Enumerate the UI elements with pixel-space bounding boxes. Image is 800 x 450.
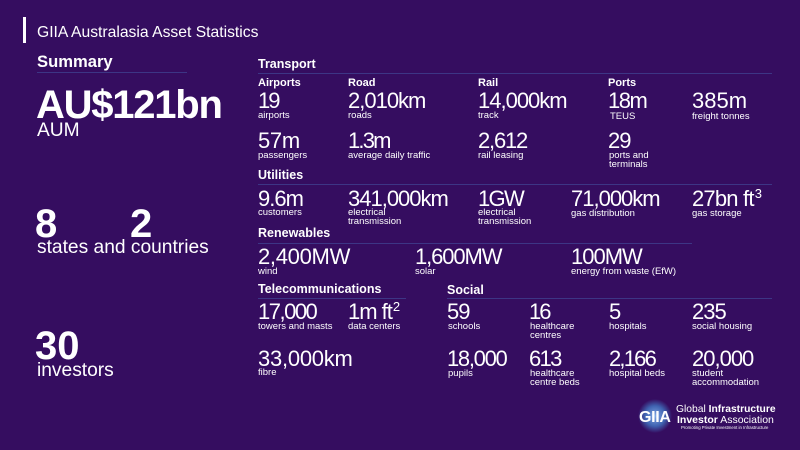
column: road: average daily traffic xyxy=(348,150,430,161)
panel: social: Social xyxy=(447,283,484,297)
panel: utilities: customers xyxy=(258,207,302,218)
column: road xyxy=(348,77,430,161)
column: rail: track xyxy=(478,110,499,121)
panel: utilities: 341,000km xyxy=(348,186,448,211)
title: GIIA Australasia Asset Statistics xyxy=(37,24,259,41)
column: ports xyxy=(608,77,750,170)
stat: investors: investors xyxy=(37,360,114,381)
panel: renewables: 1,600MW xyxy=(415,244,503,269)
panel: social: 5 xyxy=(609,299,621,324)
panel: social: 2,166 xyxy=(609,346,657,371)
panel: telecommunications: 33,000km xyxy=(258,346,353,371)
stat: assets under management: AU$121bn xyxy=(36,83,222,127)
column: rail: 2,612 xyxy=(478,128,528,153)
panel: telecommunications: fibre xyxy=(258,367,276,378)
panel: social: schools xyxy=(448,321,480,332)
panel: utilities xyxy=(258,168,772,227)
panel: social: pupils xyxy=(448,368,473,379)
panel: social: healthcare xyxy=(530,368,574,379)
column: airports: 19 xyxy=(258,88,280,113)
logo: GIIA: Promoting Private Investment in Infrastructure xyxy=(681,425,769,430)
panel: utilities: 71,000km xyxy=(571,186,660,211)
column: ports: terminals xyxy=(609,159,648,170)
column: airports: 57m xyxy=(258,128,300,153)
panel: social: 16 xyxy=(529,299,551,324)
column: rail: rail leasing xyxy=(478,150,523,161)
panel: social: centres xyxy=(530,330,561,341)
panel: utilities: gas storage xyxy=(692,208,742,219)
panel: utilities: electrical xyxy=(348,207,386,218)
stat: investors xyxy=(35,324,114,381)
panel: telecommunications: 17,000 xyxy=(258,299,318,324)
panel: transport xyxy=(258,57,772,170)
column: ports: TEUS xyxy=(610,111,635,122)
column: ports: 385m xyxy=(692,88,747,113)
panel: social: hospital beds xyxy=(609,368,665,379)
panel: renewables xyxy=(257,226,692,277)
logo: GIIA: Investor Association xyxy=(677,414,774,426)
column: airports: airports xyxy=(258,110,290,121)
panel: utilities: transmission xyxy=(348,216,401,227)
column: rail: Rail xyxy=(478,77,498,89)
panel: social: centre beds xyxy=(530,377,580,388)
heading: summary: Summary xyxy=(37,52,113,71)
panel: utilities: 1GW xyxy=(478,186,525,211)
panel: utilities: gas distribution xyxy=(571,208,635,219)
panel: social xyxy=(447,283,772,388)
column: ports: 18m xyxy=(608,88,646,113)
column: ports: freight tonnes xyxy=(692,111,750,122)
stat: states and countries: 8 xyxy=(35,202,57,246)
panel: renewables: energy from waste (EfW) xyxy=(571,266,676,277)
column: road: 1.3m xyxy=(348,128,390,153)
panel: renewables: solar xyxy=(415,266,436,277)
column: rail: 14,000km xyxy=(478,88,567,113)
column: road: roads xyxy=(348,110,372,121)
panel: telecommunications: data centers xyxy=(348,321,401,332)
column: airports: passengers xyxy=(258,150,307,161)
panel: renewables: wind xyxy=(257,266,278,277)
panel: social: 59 xyxy=(447,299,470,324)
title xyxy=(23,17,259,43)
panel: utilities: 3 xyxy=(755,186,762,201)
column: ports: Ports xyxy=(608,77,636,89)
panel: renewables: 100MW xyxy=(571,244,643,269)
panel: telecommunications: towers and masts xyxy=(258,321,333,332)
column: road: Road xyxy=(348,77,376,89)
panel: social: social housing xyxy=(692,321,752,332)
panel: social: accommodation xyxy=(692,377,759,388)
panel: utilities: 9.6m xyxy=(258,186,303,211)
column: road: 2,010km xyxy=(348,88,425,113)
column: rail xyxy=(478,77,567,161)
stat: states and countries xyxy=(35,202,209,258)
column: airports: Airports xyxy=(258,77,301,89)
panel: utilities: electrical xyxy=(478,207,516,218)
stat: states and countries: states and countries xyxy=(37,237,209,258)
panel: renewables: Renewables xyxy=(258,226,330,240)
panel: social: 613 xyxy=(529,346,562,371)
column: ports: ports and xyxy=(609,150,649,161)
panel: telecommunications xyxy=(258,282,406,378)
panel: utilities: 27bn ft xyxy=(692,186,754,211)
panel: telecommunications: 1m ft xyxy=(348,299,392,324)
stat: investors: 30 xyxy=(35,324,80,368)
panel: social: student xyxy=(692,368,724,379)
panel: social: 20,000 xyxy=(692,346,754,371)
panel: social: 18,000 xyxy=(447,346,508,371)
panel: social: healthcare xyxy=(530,321,574,332)
stat: assets under management: AUM xyxy=(37,120,80,141)
panel: transport: Transport xyxy=(258,57,316,71)
panel: summary xyxy=(35,52,222,381)
column: ports: 29 xyxy=(608,128,631,153)
panel: utilities: Utilities xyxy=(258,168,303,182)
logo: GIIA xyxy=(638,399,776,433)
logo: GIIA: GIIA xyxy=(639,409,671,426)
panel: telecommunications: Telecommunications xyxy=(258,282,381,296)
panel: utilities: transmission xyxy=(478,216,531,227)
logo: GIIA: Global Infrastructure xyxy=(676,404,776,415)
panel: telecommunications: 2 xyxy=(393,299,400,314)
panel: social: 235 xyxy=(692,299,726,324)
panel: renewables: 2,400MW xyxy=(258,244,351,269)
column: airports xyxy=(258,77,307,161)
stat: states and countries: 2 xyxy=(130,202,152,246)
panel: social: hospitals xyxy=(609,321,647,332)
